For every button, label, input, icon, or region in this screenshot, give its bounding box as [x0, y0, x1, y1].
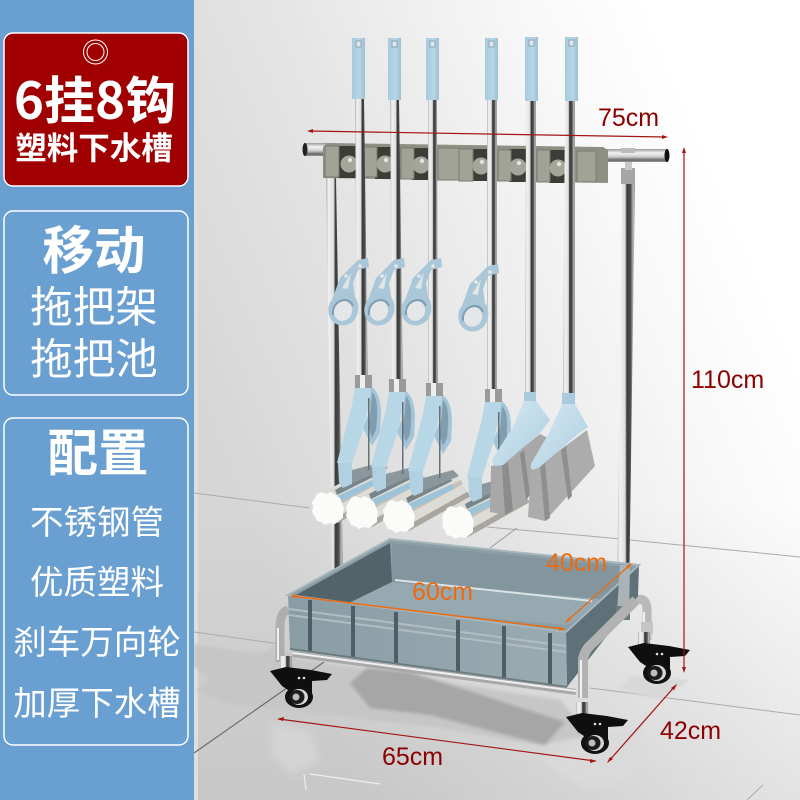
- heading: 配置: 配置: [48, 412, 148, 486]
- container: grey plastic sink: [288, 539, 639, 687]
- subheading: 塑料下水槽: 塑料下水槽: [15, 123, 173, 169]
- dimension: 40cm: 40cm: [546, 549, 607, 577]
- panel: mobile: [4, 209, 188, 395]
- dimension: 110cm: [682, 147, 764, 673]
- panel: configuration: [4, 412, 188, 745]
- dimension: 42cm: [607, 684, 721, 763]
- text: 拖把架: 拖把架: [30, 274, 158, 335]
- interior walls: [288, 539, 639, 632]
- text: 拖把池: 拖把池: [30, 326, 158, 387]
- right side wall: [566, 565, 639, 687]
- icon: hanging hole: [84, 40, 108, 64]
- rail: top bar ends: [302, 143, 670, 162]
- text: 刹车万向轮: 刹车万向轮: [13, 615, 181, 664]
- base frame: front tubes and legs: [278, 600, 636, 698]
- frame: upright posts: [326, 150, 635, 600]
- rack: grey mop holder: [323, 143, 608, 183]
- front wall: [288, 595, 567, 687]
- dimension: 110cm: 110cm: [691, 366, 764, 394]
- mop and broom poles: [355, 98, 575, 398]
- casters: [270, 632, 690, 754]
- dimension: 65cm: 65cm: [382, 743, 443, 771]
- dimension: 75cm: [307, 104, 668, 139]
- heading: 移动: 移动: [42, 209, 146, 284]
- handles: six blue grips: [352, 37, 578, 101]
- background: [194, 0, 800, 800]
- right post: lower section inside the sink: [616, 565, 630, 620]
- text: 加厚下水槽: 加厚下水槽: [13, 676, 181, 725]
- dimension: 60cm: 60cm: [412, 578, 473, 606]
- mops: four roller mops: [312, 375, 530, 539]
- base frame: rear tubes: [586, 599, 653, 650]
- hooks: four ring clamps: [328, 258, 499, 331]
- dimension: 40cm: [546, 549, 632, 623]
- panel: red badge: [4, 33, 188, 186]
- dimension: 75cm: 75cm: [598, 104, 659, 132]
- dimension: 65cm: [277, 717, 597, 771]
- text: 优质塑料: 优质塑料: [30, 555, 164, 604]
- floor: tile lines and shadows: [194, 493, 800, 800]
- dimension: 60cm: [290, 578, 566, 631]
- heading: 6挂8钩: 6挂8钩: [14, 60, 176, 134]
- dimension: 42cm: 42cm: [660, 717, 721, 745]
- brooms: two blue brooms: [490, 392, 595, 521]
- text: 不锈钢管: 不锈钢管: [30, 495, 164, 544]
- panel: left sidebar: [0, 0, 194, 800]
